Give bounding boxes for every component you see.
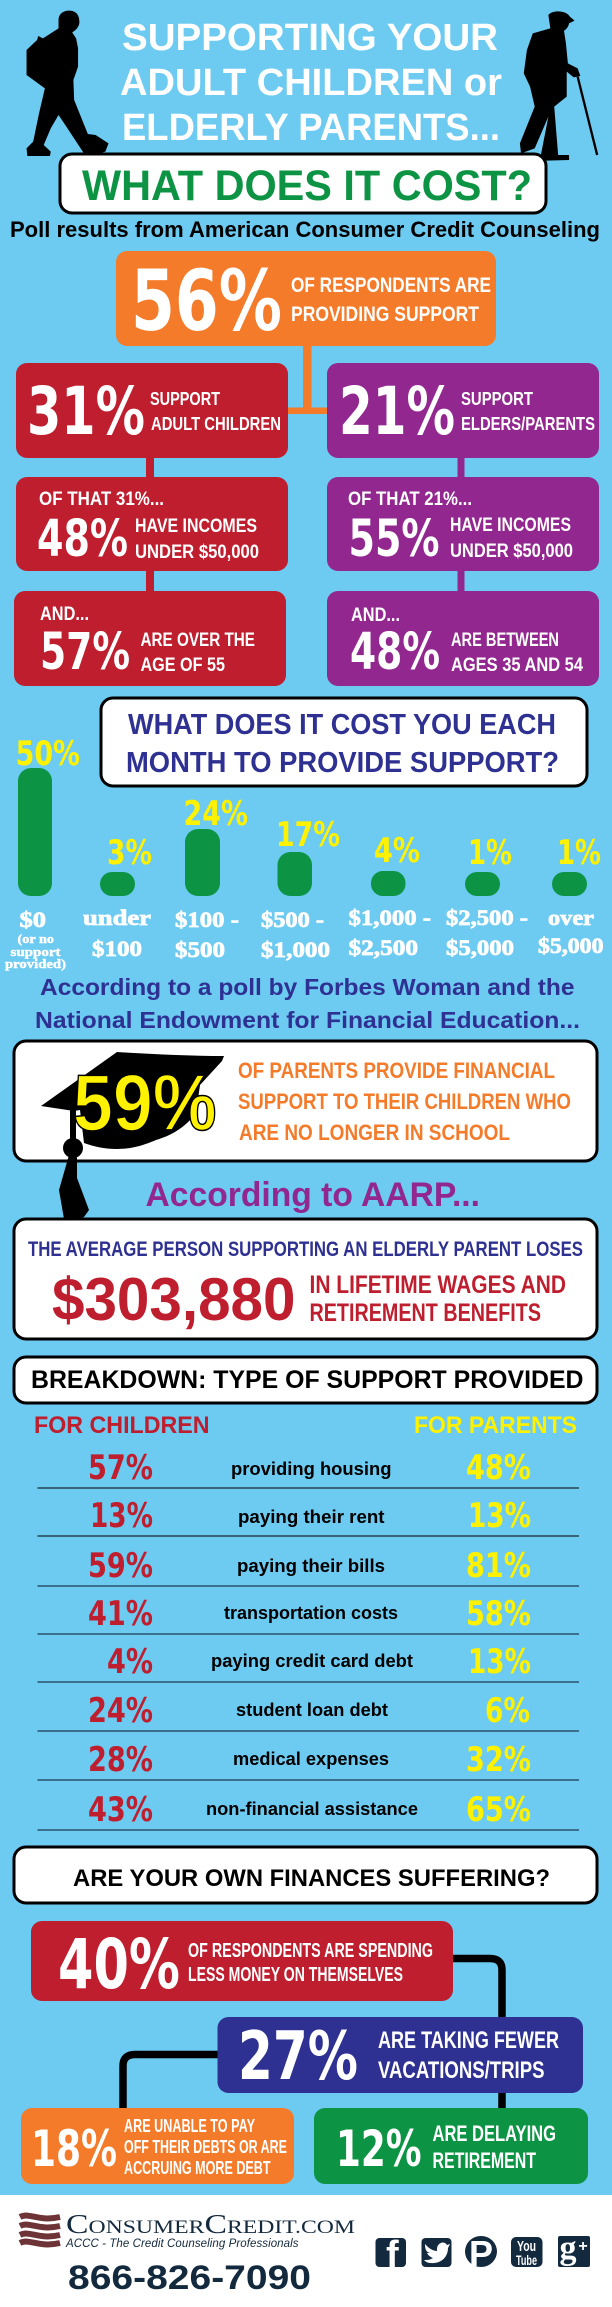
panel: 57% over age 55	[14, 591, 286, 686]
panel: 18% unable to pay debts: ACCRUING MORE DEBT	[124, 2158, 271, 2178]
panel: 12% delaying retirement: RETIREMENT	[432, 2148, 536, 2173]
title: SUPPORTING YOUR	[122, 17, 498, 59]
panel: 48% between ages 35 and 54: 48%	[350, 623, 440, 682]
bar category labels: $5,000	[538, 933, 604, 958]
panel: 27% fewer vacations	[218, 2017, 583, 2095]
panel: 55% incomes under $50,000	[327, 477, 599, 571]
panel: 57% over age 55: AND...	[40, 604, 89, 625]
parents percentages: 13%	[468, 1496, 531, 1536]
table: type of support provided	[34, 1412, 579, 1831]
parents percentages	[466, 1448, 531, 1830]
text: Forbes Woman poll source	[35, 974, 580, 1033]
panel: 48% incomes under $50,000: OF THAT 31%...	[39, 489, 164, 510]
icon: youtube	[511, 2237, 542, 2268]
bar category labels: $2,500	[348, 935, 418, 960]
children percentages: 59%	[88, 1546, 153, 1586]
icon: elderly man with cane silhouette	[520, 11, 597, 161]
column heading: for children: FOR CHILDREN	[34, 1412, 210, 1439]
bar values: 1%	[468, 833, 512, 873]
connector: orange tree	[288, 346, 327, 414]
heading: breakdown	[14, 1357, 597, 1403]
panel: AARP lost wages: RETIREMENT BENEFITS	[310, 1299, 541, 1327]
bar values: 24%	[184, 794, 248, 834]
panel: 48% incomes under $50,000: 48%	[37, 510, 128, 569]
parents percentages: 81%	[466, 1546, 531, 1586]
panel: 21% support elders/parents: SUPPORT	[461, 389, 533, 409]
title: ADULT CHILDREN or	[120, 62, 502, 104]
footer	[0, 2195, 612, 2307]
parents percentages: 6%	[485, 1691, 530, 1731]
bar category labels	[5, 905, 604, 971]
icon: google plus: +	[578, 2238, 588, 2255]
parents percentages: 65%	[466, 1790, 531, 1830]
children percentages: 13%	[90, 1496, 153, 1536]
heading: monthly cost: WHAT DOES IT COST YOU EACH	[128, 709, 556, 741]
panel: 21% support elders/parents	[327, 363, 599, 458]
icon: google plus	[558, 2230, 590, 2267]
children percentages: 28%	[88, 1740, 153, 1780]
panel: 40% spending less: 40%	[58, 1925, 180, 2005]
support type labels: paying their rent	[238, 1507, 384, 1527]
connector: red tree	[146, 458, 154, 593]
bar category labels: support	[10, 944, 61, 959]
icon: youtube: You	[517, 2238, 536, 2255]
icon: pinterest: P	[469, 2233, 493, 2274]
children percentages: 4%	[107, 1642, 153, 1682]
parents percentages: 13%	[468, 1642, 531, 1682]
panel: 55% incomes under $50,000: OF THAT 21%...	[348, 489, 472, 510]
title	[120, 17, 502, 149]
support type labels: paying their bills	[237, 1556, 385, 1576]
text: parents provide financial support: ARE NO LONGER IN SCHOOL	[239, 1120, 510, 1145]
bar values: 17%	[276, 815, 340, 855]
panel: AARP lost wages	[14, 1219, 597, 1339]
panel: 27% fewer vacations: VACATIONS/TRIPS	[378, 2057, 544, 2084]
support type labels	[206, 1459, 418, 1819]
panel: 55% incomes under $50,000: UNDER $50,000	[450, 541, 573, 562]
panel: 12% delaying retirement: 12%	[336, 2120, 422, 2178]
children percentages	[88, 1448, 153, 1830]
panel: 55% incomes under $50,000: HAVE INCOMES	[450, 515, 571, 536]
bar category labels: $1,000	[261, 937, 330, 962]
panel: 27% fewer vacations: ARE TAKING FEWER	[378, 2027, 559, 2054]
support type labels: non-financial assistance	[206, 1799, 418, 1819]
panel: 48% between ages 35 and 54	[327, 591, 599, 686]
heading: own finances: ARE YOUR OWN FINANCES SUFFERING?	[73, 1865, 550, 1892]
callout: 59% figure: 59%	[73, 1058, 217, 1147]
heading: according to AARP: According to AARP...	[146, 1176, 480, 1214]
panel: 59% of parents	[14, 1041, 597, 1161]
children percentages: 24%	[88, 1691, 153, 1731]
parents percentages: 32%	[466, 1740, 531, 1780]
panel: 27% fewer vacations: 27%	[238, 2017, 358, 2095]
connector: black flow lines	[123, 1958, 502, 2110]
panel: 21% support elders/parents: 21%	[339, 373, 455, 450]
subtitle: poll source: Poll results from American Consumer Credit Counseling	[10, 217, 600, 242]
heading: monthly cost: MONTH TO PROVIDE SUPPORT?	[126, 747, 559, 779]
icon: twitter	[422, 2238, 452, 2267]
panel: 48% incomes under $50,000	[16, 477, 288, 571]
text: Forbes Woman poll source: National Endowment for Financial Education...	[35, 1007, 580, 1033]
children percentages: 41%	[88, 1594, 153, 1634]
connector: purple tree	[458, 458, 464, 593]
phone number: 866-826-7090	[68, 2259, 311, 2297]
panel: 31% support adult children: 31%	[27, 373, 145, 450]
panel: 40% spending less: LESS MONEY ON THEMSELVES	[188, 1964, 403, 1986]
support type labels: student loan debt	[236, 1700, 388, 1720]
panel: 31% support adult children: SUPPORT	[150, 389, 220, 409]
panel: 55% incomes under $50,000: 55%	[348, 510, 440, 569]
panel: 18% unable to pay debts	[21, 2108, 294, 2184]
heading: breakdown: BREAKDOWN: TYPE OF SUPPORT PROVIDED	[31, 1366, 584, 1394]
panel: 57% over age 55: ARE OVER THE	[140, 630, 255, 651]
bar category labels: over	[548, 905, 594, 930]
bar values: 50%	[16, 734, 80, 774]
panel: 48% incomes under $50,000: HAVE INCOMES	[135, 516, 257, 537]
column heading: for parents: FOR PARENTS	[414, 1412, 577, 1439]
logo wordmark: CONSUMER CREDIT.COM	[66, 2209, 355, 2239]
support type labels: medical expenses	[233, 1749, 389, 1769]
icon: graduation cap	[41, 1052, 224, 1219]
bar category labels: $2,500 -	[446, 905, 528, 930]
panel: 48% between ages 35 and 54: AND...	[351, 605, 400, 626]
title: ELDERLY PARENTS...	[122, 107, 500, 149]
bar category labels: under	[83, 905, 151, 930]
panel: 56% providing support: 56%	[131, 252, 282, 350]
panel: 12% delaying retirement	[314, 2108, 588, 2184]
parents percentages: 58%	[466, 1594, 531, 1634]
panel: 48% between ages 35 and 54: AGES 35 AND 54	[451, 655, 583, 676]
panel: 56% providing support: OF RESPONDENTS ARE	[291, 274, 491, 297]
icon: walking man with backpack silhouette	[27, 11, 109, 156]
heading: monthly cost	[101, 698, 587, 786]
panel: 56% providing support	[116, 251, 496, 350]
panel: 12% delaying retirement: ARE DELAYING	[432, 2121, 556, 2146]
bar category labels: provided)	[5, 956, 66, 971]
panel: 31% support adult children: ADULT CHILDREN	[151, 414, 281, 434]
icon: facebook: f	[386, 2234, 399, 2276]
panel: 48% incomes under $50,000: UNDER $50,000	[135, 542, 259, 563]
text: parents provide financial support: OF PARENTS PROVIDE FINANCIAL	[238, 1058, 555, 1083]
panel: 57% over age 55: AGE OF 55	[140, 655, 225, 676]
bar category labels: $0	[20, 907, 46, 932]
logo tagline: ACCC - The Credit Counseling Professionals	[65, 2238, 299, 2250]
panel: 48% between ages 35 and 54: ARE BETWEEN	[451, 630, 559, 651]
bar category labels: $500 -	[261, 907, 324, 932]
bar category labels: (or no	[18, 931, 54, 946]
children percentages: 43%	[88, 1790, 153, 1830]
support type labels: providing housing	[231, 1459, 392, 1479]
parents percentages: 48%	[466, 1448, 531, 1488]
bar category labels: $100 -	[175, 907, 239, 932]
bar category labels: $100	[92, 936, 142, 961]
icon: google plus: g	[560, 2230, 576, 2267]
panel: AARP lost wages: IN LIFETIME WAGES AND	[310, 1271, 566, 1299]
bar values: 3%	[107, 833, 152, 873]
panel: 18% unable to pay debts: ARE UNABLE TO PAY	[124, 2116, 255, 2136]
bar category labels: $5,000	[446, 935, 514, 960]
text: parents provide financial support	[238, 1058, 571, 1145]
icon: youtube: Tube	[516, 2252, 537, 2268]
bars	[18, 768, 587, 896]
support type labels: transportation costs	[224, 1603, 398, 1623]
bar category labels: $500	[175, 937, 225, 962]
panel: 57% over age 55: 57%	[40, 623, 130, 682]
bar chart: monthly cost of support	[5, 734, 604, 971]
panel: 18% unable to pay debts: OFF THEIR DEBTS OR ARE	[124, 2137, 287, 2157]
heading: own finances	[14, 1847, 597, 1903]
panel: 40% spending less: OF RESPONDENTS ARE SPENDING	[188, 1940, 433, 1962]
panel: 18% unable to pay debts: 18%	[31, 2120, 117, 2178]
bar values: 4%	[374, 831, 420, 871]
support type labels: paying credit card debt	[211, 1651, 413, 1671]
icon: facebook	[376, 2234, 406, 2276]
bar values	[16, 734, 601, 873]
panel: AARP lost wages: $303,880	[52, 1266, 296, 1333]
icon: ConsumerCredit flag logo	[20, 2216, 60, 2244]
panel: 40% spending less	[31, 1921, 453, 2005]
panel: 56% providing support: PROVIDING SUPPORT	[291, 303, 479, 326]
children percentages: 57%	[88, 1448, 153, 1488]
text: Forbes Woman poll source: According to a poll by Forbes Woman and the	[40, 974, 574, 1000]
heading: what does it cost: WHAT DOES IT COST?	[82, 162, 532, 210]
bar category labels: $1,000 -	[348, 905, 431, 930]
panel: 31% support adult children	[16, 363, 288, 458]
